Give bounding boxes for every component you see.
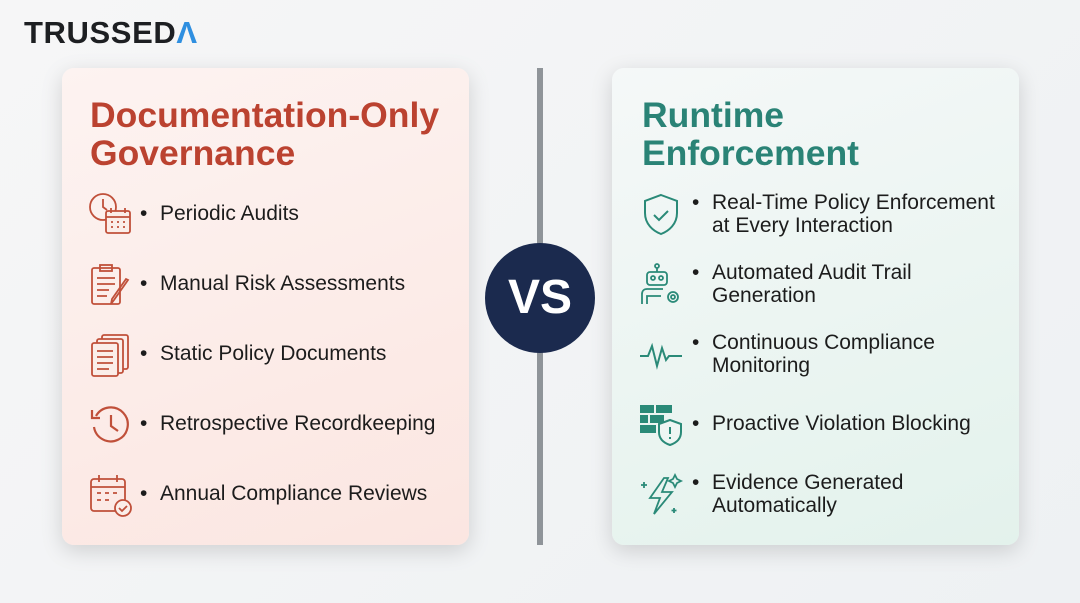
item: evidence generated automatically: [641, 471, 903, 517]
item: real-time policy enforcement: [644, 191, 995, 237]
item: evidence generated automatically: Automatically: [712, 494, 837, 517]
item: static policy documents: Static Policy Documents: [160, 342, 386, 365]
item: proactive violation blocking: Proactive Violation Blocking: [712, 412, 971, 435]
heading: documentation-only governance: Documentation-Only: [90, 95, 439, 135]
VS badge: VS: [508, 271, 572, 324]
item: proactive violation blocking: [640, 405, 971, 446]
item: static policy documents: [91, 334, 386, 377]
item: retrospective recordkeeping: Retrospective Recordkeeping: [160, 412, 435, 435]
item: continuous compliance monitoring: Continuous Compliance: [712, 331, 935, 354]
divider line: [537, 68, 543, 545]
item: annual compliance reviews: [90, 475, 427, 517]
heading: documentation-only governance: Governance: [90, 133, 295, 173]
panel: runtime enforcement: [612, 68, 1019, 545]
panel: documentation-only: [62, 68, 469, 545]
item: real-time policy enforcement: at Every Interaction: [712, 214, 893, 237]
item: evidence generated automatically: Evidence Generated: [712, 471, 903, 494]
item: periodic audits: [89, 193, 299, 234]
item: automated audit trail: Automated Audit Trail: [712, 261, 912, 284]
item: manual risk assessments: [91, 264, 405, 305]
logo: TRUSSEDΛ: [24, 15, 198, 50]
item: annual compliance reviews: Annual Compliance Reviews: [160, 482, 427, 505]
item: automated audit trail: Generation: [712, 284, 816, 307]
item: manual risk assessments: Manual Risk Assessments: [160, 272, 405, 295]
item: real-time policy enforcement: Real-Time Policy Enforcement: [712, 191, 995, 214]
item: retrospective recordkeeping: [90, 406, 435, 443]
item: periodic audits: Periodic Audits: [160, 202, 299, 225]
heading: runtime enforcement: Runtime: [642, 95, 784, 135]
heading: documentation-only governance: [90, 95, 439, 173]
item: automated audit trail: [641, 261, 912, 307]
VS badge: [485, 243, 595, 353]
heading: runtime enforcement: [642, 95, 859, 173]
heading: runtime enforcement: Enforcement: [642, 133, 859, 173]
item: continuous compliance monitoring: Monitoring: [712, 354, 810, 377]
item: continuous compliance monitoring: [640, 331, 935, 377]
